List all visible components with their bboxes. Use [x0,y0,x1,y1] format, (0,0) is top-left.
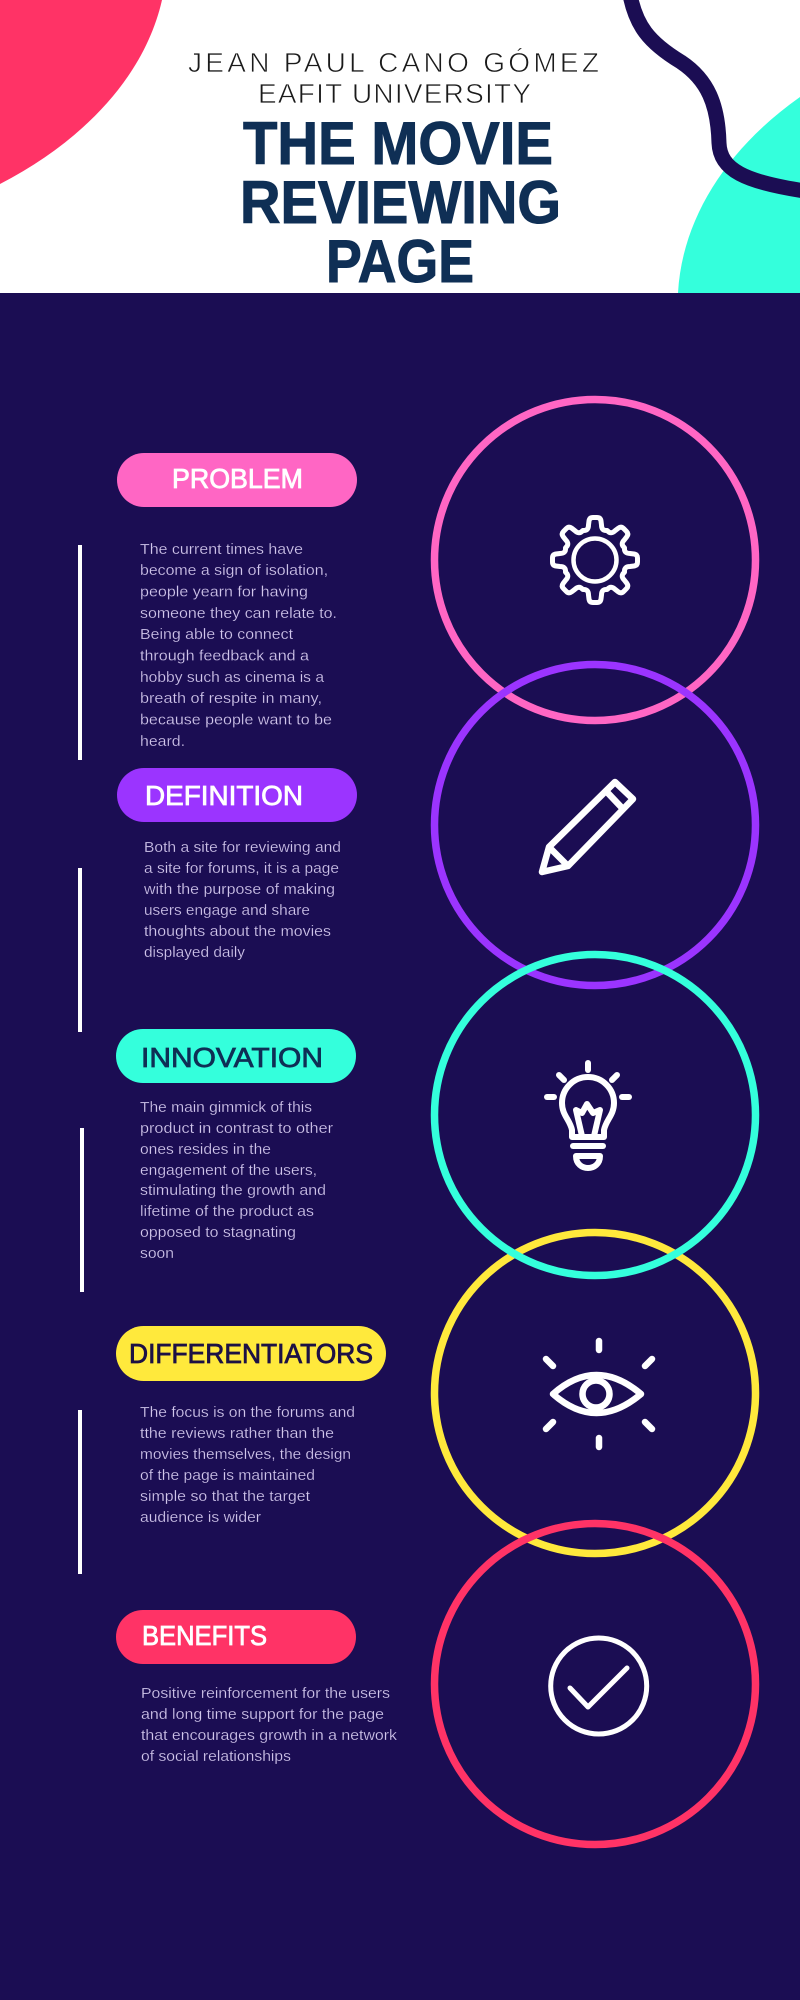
definition text: a site for forums, it is a page [144,860,339,877]
definition text: Both a site for reviewing and [144,839,341,856]
panel: differentiators [78,1326,386,1574]
innovation text [140,1099,333,1262]
innovation text: stimulating the growth and [140,1182,326,1199]
problem text: Being able to connect [140,626,294,643]
problem text [140,541,337,750]
definition text: with the purpose of making [143,881,335,898]
icon: eye [546,1341,652,1447]
innovation text: The main gimmick of this [140,1099,312,1116]
differentiators text: simple so that the target [140,1488,311,1505]
innovation text: engagement of the users, [140,1162,317,1179]
problem pill [117,453,357,507]
innovation text: opposed to stagnating [140,1224,296,1241]
problem text: people yearn for having [140,584,308,600]
problem text: become a sign of isolation, [140,562,328,579]
definition pill [117,768,357,822]
problem text: breath of respite in many, [140,690,322,707]
problem text: because people want to be [140,712,332,728]
panel: benefits [116,1610,398,1765]
icon: pencil [542,782,633,872]
differentiators text: of the page is maintained [140,1467,315,1484]
innovation text: soon [140,1245,174,1262]
navy squiggle [630,0,800,191]
differentiators heading: DIFFERENTIATORS [129,1338,373,1369]
differentiators text [140,1404,355,1526]
innovation text: product in contrast to other [140,1120,333,1137]
icon: check mark [551,1638,647,1734]
definition text: thoughts about the movies [144,923,331,940]
red corner shape [0,0,162,184]
problem heading: PROBLEM [172,463,303,494]
benefits heading: BENEFITS [142,1620,267,1651]
title [240,110,561,295]
problem side bar [78,545,82,760]
problem text: The current times have [140,541,303,558]
teal corner shape [678,97,800,293]
innovation heading: INNOVATION [141,1042,323,1073]
problem text: someone they can relate to. [140,605,337,622]
innovation text: lifetime of the product as [140,1203,314,1220]
differentiators text: tthe reviews rather than the [140,1425,334,1442]
benefits pill [116,1610,356,1664]
university: EAFIT UNIVERSITY [258,78,531,109]
ring: definition [434,664,756,986]
panel: definition [78,768,357,1032]
icon: light bulb [547,1063,629,1168]
header panel [0,0,800,295]
innovation side bar [80,1128,84,1292]
definition side bar [78,868,82,1032]
innovation pill [116,1029,356,1083]
benefits text: Positive reinforcement for the users [141,1685,390,1702]
problem text: heard. [140,733,185,750]
definition text: displayed daily [144,944,246,961]
differentiators text: audience is wider [140,1509,261,1526]
benefits text: of social relationships [141,1748,291,1765]
title: PAGE [326,228,474,295]
ring: benefits [434,1524,756,1844]
differentiators text: The focus is on the forums and [140,1404,355,1421]
ring: differentiators [434,1232,756,1554]
author name: JEAN PAUL CANO GÓMEZ [188,47,599,78]
problem text: through feedback and a [140,648,310,664]
definition text: users engage and share [144,902,310,919]
definition text [143,839,341,961]
panel: problem [78,453,357,760]
title: REVIEWING [240,169,561,236]
differentiators text: movies themselves, the design [140,1446,351,1463]
benefits text [141,1685,398,1765]
problem text: hobby such as cinema is a [140,669,325,686]
title: THE MOVIE [243,110,553,177]
benefits text: and long time support for the page [141,1706,384,1723]
differentiators side bar [78,1410,82,1574]
ring: problem [434,400,756,720]
panel: innovation [80,1029,356,1292]
definition heading: DEFINITION [145,780,303,811]
icon: gear [552,518,638,602]
differentiators pill [116,1326,386,1381]
innovation text: ones resides in the [140,1141,271,1158]
benefits text: that encourages growth in a network [141,1727,398,1744]
ring: innovation [434,954,756,1276]
